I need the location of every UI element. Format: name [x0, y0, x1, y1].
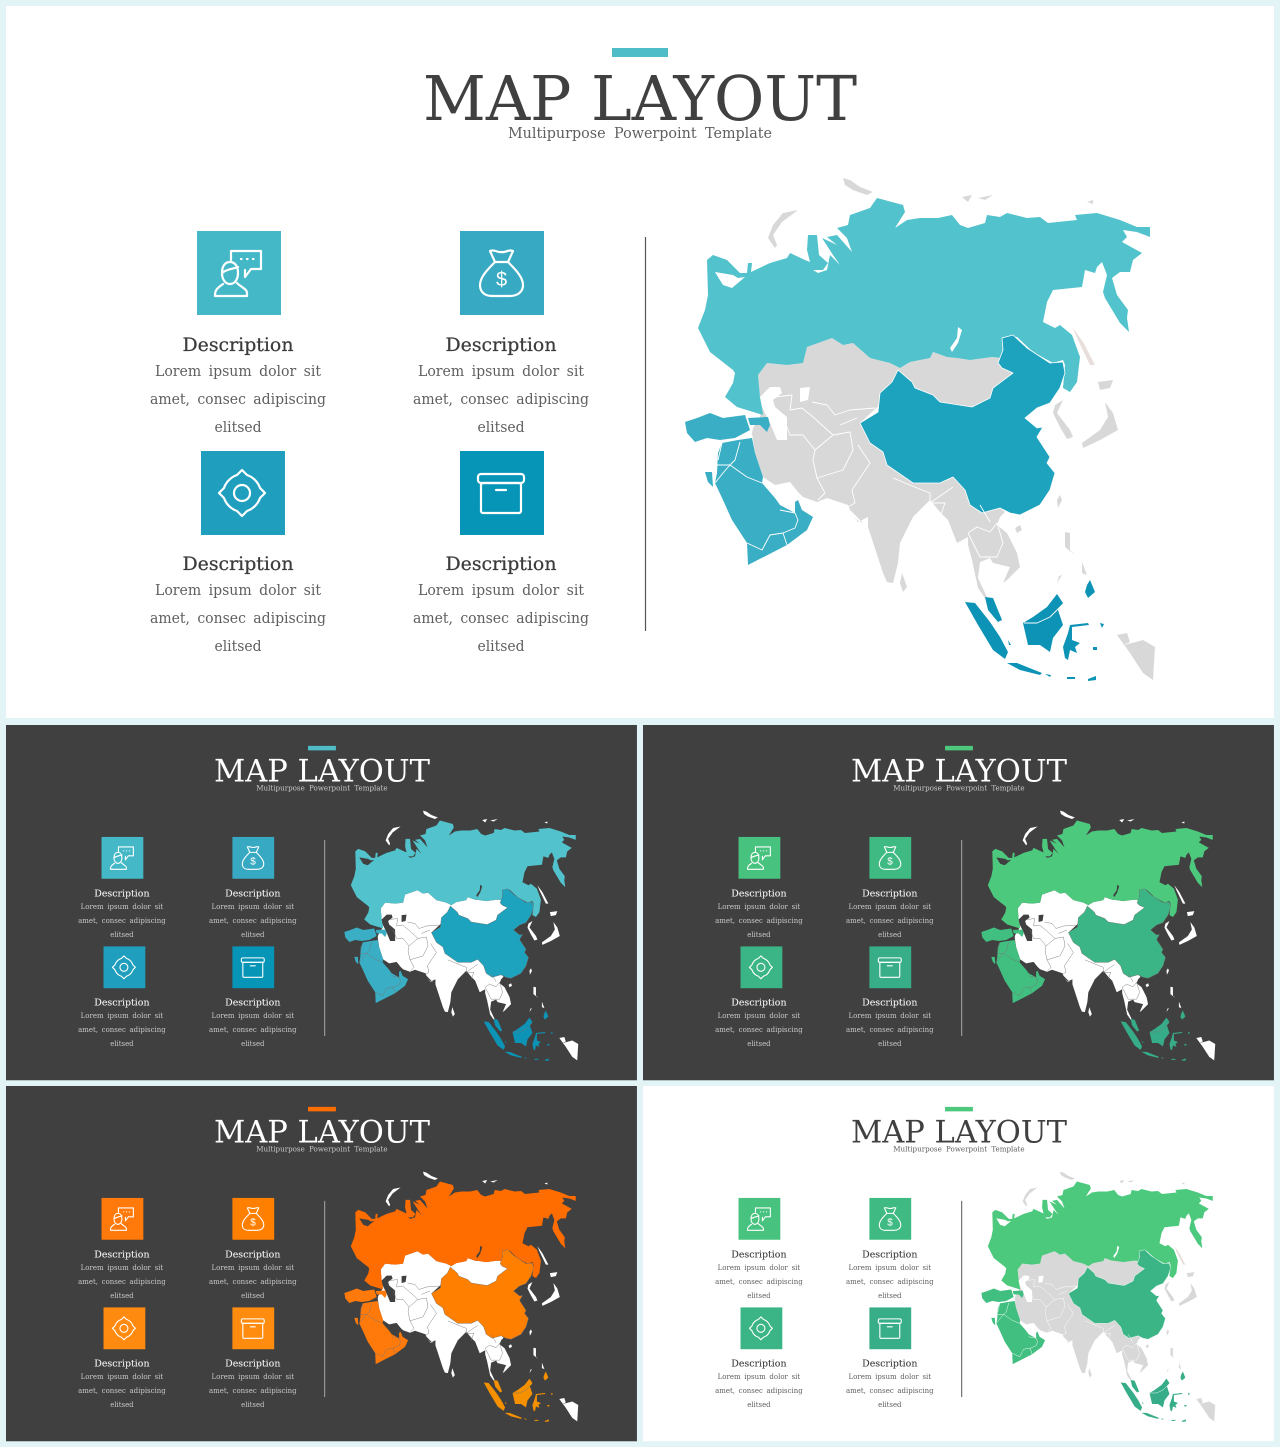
icon: money bag: [869, 1198, 911, 1240]
title: MAP LAYOUT: [851, 754, 1067, 790]
icon: target: [741, 946, 782, 988]
text block: description 2: Description: [862, 889, 917, 900]
text block: description 2: Description: [862, 1250, 917, 1261]
accent bar: [612, 48, 668, 57]
text block: description 2: Description: [225, 1250, 280, 1261]
text block: description 4: [209, 1359, 297, 1409]
text block: description 3: Lorem ipsum dolor sit: [718, 1372, 800, 1381]
text block: description 3: amet, consec adipiscing: [150, 611, 326, 627]
text block: description 4: amet, consec adipiscing: [846, 1386, 934, 1395]
subtitle: Multipurpose Powerpoint Template: [508, 126, 772, 142]
text block: description 3: elitsed: [214, 639, 262, 655]
text block: description 4: [413, 553, 589, 655]
text block: description 3: Lorem ipsum dolor sit: [81, 1372, 163, 1381]
map: Asia teal: [685, 178, 1155, 681]
text block: description 1: Lorem ipsum dolor sit: [718, 902, 800, 911]
subtitle: Multipurpose Powerpoint Template: [256, 784, 388, 793]
icon: person with speech bubble: [102, 837, 143, 879]
text block: description 2: elitsed: [878, 1291, 902, 1300]
text block: description 4: Lorem ipsum dolor sit: [848, 1372, 931, 1381]
accent bar: [308, 1107, 336, 1111]
text block: description 2: Description: [225, 889, 280, 900]
text block: description 3: Description: [94, 1359, 150, 1370]
text block: description 1: amet, consec adipiscing: [715, 1277, 803, 1286]
text block: description 2: Lorem ipsum dolor sit: [848, 902, 931, 911]
text block: description 2: amet, consec adipiscing: [846, 1277, 934, 1286]
text block: description 4: elitsed: [241, 1039, 265, 1048]
map: Asia green on light: [981, 1172, 1215, 1422]
text block: description 1: Lorem ipsum dolor sit: [81, 1263, 163, 1272]
text block: description 2: elitsed: [241, 930, 265, 939]
text block: description 1: Description: [731, 1250, 787, 1261]
icon: person with speech bubble: [102, 1198, 143, 1240]
text block: description 1: elitsed: [110, 1291, 134, 1300]
text block: description 2: Lorem ipsum dolor sit: [211, 1263, 294, 1272]
icon: target: [741, 1307, 782, 1349]
title: MAP LAYOUT: [214, 1115, 430, 1151]
text block: description 1: [715, 889, 803, 939]
text block: description 4: elitsed: [241, 1400, 265, 1409]
text block: description 3: elitsed: [747, 1400, 771, 1409]
text block: description 3: Lorem ipsum dolor sit: [718, 1011, 800, 1020]
text block: description 2: elitsed: [878, 930, 902, 939]
text block: description 1: amet, consec adipiscing: [715, 916, 803, 925]
text block: description 3: [715, 998, 803, 1048]
text block: description 4: Lorem ipsum dolor sit: [211, 1011, 294, 1020]
text block: description 1: elitsed: [747, 1291, 771, 1300]
text block: description 3: elitsed: [747, 1039, 771, 1048]
icon: person with speech bubble: [197, 231, 281, 315]
subtitle: Multipurpose Powerpoint Template: [893, 1145, 1025, 1154]
text block: description 3: amet, consec adipiscing: [715, 1386, 803, 1395]
icon: money bag: $: [496, 269, 507, 291]
title: MAP LAYOUT: [851, 1115, 1067, 1151]
text block: description 2: amet, consec adipiscing: [209, 1277, 297, 1286]
text block: description 4: elitsed: [478, 639, 524, 655]
text block: description 3: Description: [731, 998, 787, 1009]
text block: description 4: Description: [225, 998, 280, 1009]
text block: description 3: elitsed: [110, 1039, 134, 1048]
text block: description 2: Description: [446, 334, 556, 356]
text block: description 2: Lorem ipsum dolor sit: [848, 1263, 931, 1272]
text block: description 2: [209, 1250, 297, 1300]
icon: person with speech bubble: [739, 837, 780, 879]
text block: description 4: elitsed: [878, 1039, 902, 1048]
text block: description 3: Lorem ipsum dolor sit: [81, 1011, 163, 1020]
map: Asia teal on dark: [344, 811, 578, 1061]
icon: money bag: $: [250, 856, 256, 867]
text block: description 3: amet, consec adipiscing: [78, 1025, 166, 1034]
text block: description 4: Lorem ipsum dolor sit: [848, 1011, 931, 1020]
accent bar: [945, 1107, 973, 1111]
panel: light green slide: [643, 1086, 1274, 1441]
icon: person with speech bubble: [739, 1198, 780, 1240]
panel: dark teal slide: [6, 725, 637, 1080]
text block: description 3: [150, 553, 326, 655]
text block: description 4: Description: [862, 998, 917, 1009]
title: MAP LAYOUT: [214, 754, 430, 790]
text block: description 4: Description: [446, 553, 556, 575]
accent bar: [945, 746, 973, 750]
text block: description 4: amet, consec adipiscing: [209, 1386, 297, 1395]
text block: description 1: [78, 889, 166, 939]
text block: description 1: [150, 334, 326, 436]
text block: description 3: Description: [731, 1359, 787, 1370]
text block: description 4: elitsed: [878, 1400, 902, 1409]
text block: description 4: [846, 998, 934, 1048]
text block: description 3: Lorem ipsum dolor sit: [155, 583, 321, 599]
text block: description 2: Lorem ipsum dolor sit: [211, 902, 294, 911]
text block: description 3: elitsed: [110, 1400, 134, 1409]
text block: description 4: Description: [225, 1359, 280, 1370]
text block: description 1: elitsed: [214, 420, 262, 436]
text block: description 3: [78, 998, 166, 1048]
text block: description 1: amet, consec adipiscing: [78, 916, 166, 925]
text block: description 1: Lorem ipsum dolor sit: [718, 1263, 800, 1272]
text block: description 4: amet, consec adipiscing: [846, 1025, 934, 1034]
icon: money bag: [869, 837, 911, 879]
text block: description 3: amet, consec adipiscing: [78, 1386, 166, 1395]
text block: description 4: Lorem ipsum dolor sit: [418, 583, 584, 599]
text block: description 1: Description: [731, 889, 787, 900]
icon: target: [104, 946, 145, 988]
icon: box: [232, 946, 274, 988]
panel: dark orange slide: [6, 1086, 637, 1441]
text block: description 3: Description: [94, 998, 150, 1009]
text block: description 2: [413, 334, 589, 436]
text block: description 4: [846, 1359, 934, 1409]
icon: box: [869, 1307, 911, 1349]
text block: description 1: Description: [94, 1250, 150, 1261]
text block: description 3: [78, 1359, 166, 1409]
icon: box: [460, 451, 544, 535]
icon: money bag: $: [887, 856, 893, 867]
text block: description 2: [846, 889, 934, 939]
text block: description 1: Lorem ipsum dolor sit: [81, 902, 163, 911]
text block: description 1: Description: [94, 889, 150, 900]
text block: description 2: amet, consec adipiscing: [846, 916, 934, 925]
panel: dark green slide: [643, 725, 1274, 1080]
text block: description 1: amet, consec adipiscing: [78, 1277, 166, 1286]
map: Asia orange on dark: [344, 1172, 578, 1422]
text block: description 2: [209, 889, 297, 939]
text block: description 1: [78, 1250, 166, 1300]
text block: description 3: [715, 1359, 803, 1409]
text block: description 4: [209, 998, 297, 1048]
map: Asia green on dark: [981, 811, 1215, 1061]
title: MAP LAYOUT: [423, 62, 857, 135]
text block: description 1: amet, consec adipiscing: [150, 392, 326, 408]
text block: description 4: amet, consec adipiscing: [413, 611, 589, 627]
subtitle: Multipurpose Powerpoint Template: [893, 784, 1025, 793]
text block: description 1: elitsed: [110, 930, 134, 939]
icon: target: [201, 451, 285, 535]
icon: box: [232, 1307, 274, 1349]
text block: description 1: elitsed: [747, 930, 771, 939]
icon: money bag: $: [887, 1217, 893, 1228]
icon: box: [869, 946, 911, 988]
text block: description 1: Description: [182, 334, 294, 356]
icon: money bag: [232, 837, 274, 879]
text block: description 4: amet, consec adipiscing: [209, 1025, 297, 1034]
text block: description 4: Description: [862, 1359, 917, 1370]
text block: description 2: amet, consec adipiscing: [413, 392, 589, 408]
text block: description 3: amet, consec adipiscing: [715, 1025, 803, 1034]
text block: description 4: Lorem ipsum dolor sit: [211, 1372, 294, 1381]
text block: description 2: [846, 1250, 934, 1300]
text block: description 1: [715, 1250, 803, 1300]
icon: target: [104, 1307, 145, 1349]
panel: main light teal slide: [6, 6, 1274, 718]
text block: description 2: amet, consec adipiscing: [209, 916, 297, 925]
icon: money bag: [232, 1198, 274, 1240]
accent bar: [308, 746, 336, 750]
text block: description 2: Lorem ipsum dolor sit: [418, 364, 584, 380]
icon: money bag: [460, 231, 544, 315]
text block: description 3: Description: [182, 553, 294, 575]
text block: description 2: elitsed: [241, 1291, 265, 1300]
text block: description 1: Lorem ipsum dolor sit: [155, 364, 321, 380]
icon: money bag: $: [250, 1217, 256, 1228]
subtitle: Multipurpose Powerpoint Template: [256, 1145, 388, 1154]
text block: description 2: elitsed: [478, 420, 524, 436]
